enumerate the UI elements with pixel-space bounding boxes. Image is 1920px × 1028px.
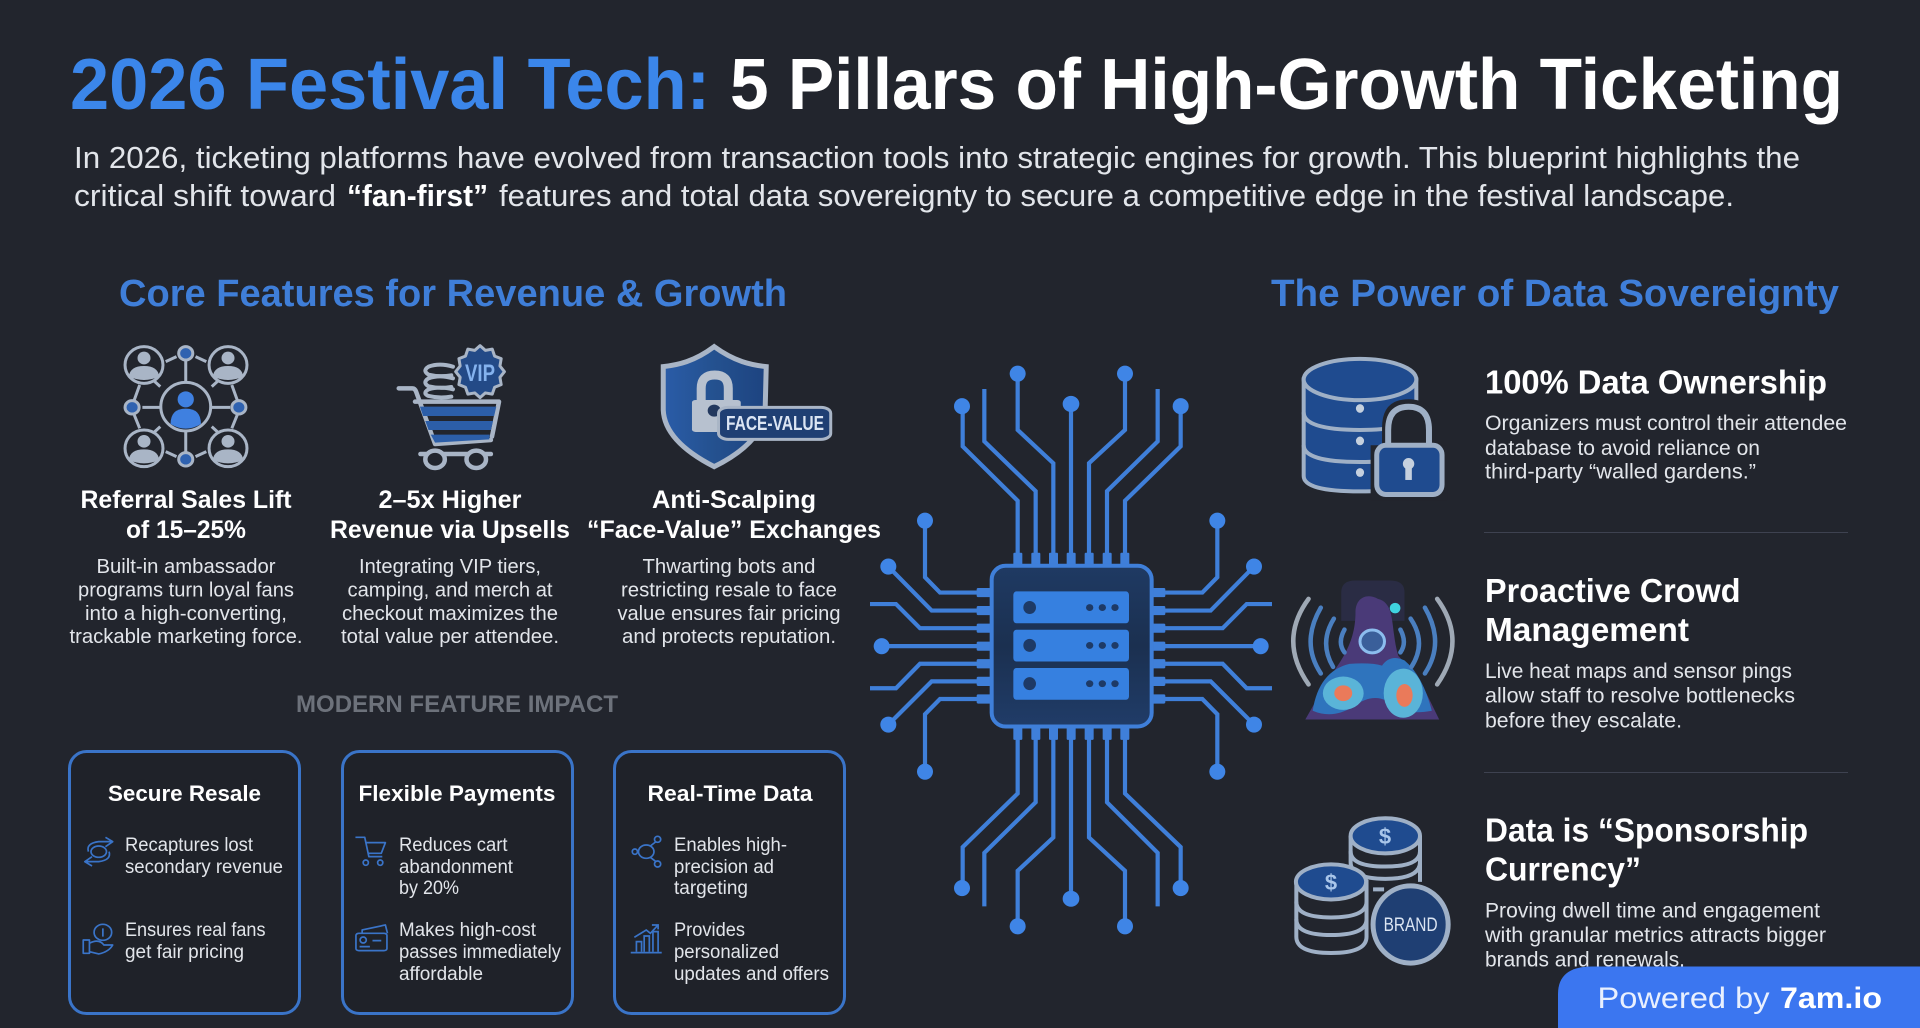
card title: Flexible Payments xyxy=(358,781,556,806)
feature body: camping, and merch at xyxy=(348,580,553,602)
item text: get fair pricing xyxy=(125,942,244,963)
feature body xyxy=(618,556,840,648)
title: 2026 Festival Tech: xyxy=(70,45,710,125)
item text: updates and offers xyxy=(674,964,829,985)
feature heading xyxy=(330,486,570,544)
feature body: and protects reputation. xyxy=(622,626,836,648)
chip body xyxy=(992,566,1152,727)
icon: resale arrows xyxy=(85,837,113,866)
feature body xyxy=(341,556,559,648)
item text xyxy=(399,835,514,899)
feature body: programs turn loyal fans xyxy=(78,580,294,602)
feature: referral sales xyxy=(70,347,302,648)
item text xyxy=(125,835,283,878)
intro text: features and total data sovereignty to secure a competitive edge in the festival landscape. xyxy=(499,178,1734,213)
feature body xyxy=(70,556,302,648)
icon: database with padlock xyxy=(1304,359,1447,500)
feature heading xyxy=(587,486,881,544)
pillar heading: Data is “Sponsorship xyxy=(1485,812,1808,848)
item text: affordable xyxy=(399,964,483,985)
title xyxy=(70,45,1843,125)
item text: Makes high-cost xyxy=(399,920,537,941)
feature: upsells xyxy=(330,346,570,648)
feature heading: 2–5x Higher xyxy=(378,486,522,514)
feature heading: Anti-Scalping xyxy=(652,486,816,514)
item text: abandonment xyxy=(399,857,514,878)
item text: Ensures real fans xyxy=(125,920,266,941)
powered by badge: 7am.io xyxy=(1780,982,1882,1015)
item text: targeting xyxy=(674,878,748,899)
feature heading: “Face-Value” Exchanges xyxy=(587,516,881,544)
intro text: “fan-first” xyxy=(347,178,488,213)
central chip illustration xyxy=(870,366,1272,934)
icon: referral network xyxy=(125,347,247,467)
feature body: value ensures fair pricing xyxy=(618,603,840,625)
pillar heading xyxy=(1485,572,1740,648)
feature heading: Referral Sales Lift xyxy=(80,486,292,514)
card: flexible payments xyxy=(342,752,572,1014)
icon: coins and brand token: BRAND xyxy=(1384,915,1438,936)
feature body: trackable marketing force. xyxy=(70,626,302,648)
pillar body: with granular metrics attracts bigger xyxy=(1484,923,1826,947)
pillar body xyxy=(1484,898,1826,972)
pillar body xyxy=(1485,659,1795,732)
item text xyxy=(674,835,787,899)
icon: shield with lock xyxy=(663,347,831,467)
item text xyxy=(125,920,266,963)
pillar body: before they escalate. xyxy=(1485,708,1682,732)
chip pins xyxy=(977,553,1165,740)
pillar body: Live heat maps and sensor pings xyxy=(1485,659,1792,683)
item text: Provides xyxy=(674,920,745,941)
card title: Real-Time Data xyxy=(648,781,813,806)
pillar heading: Management xyxy=(1485,611,1689,648)
icon: shield with lock: FACE-VALUE xyxy=(726,413,824,435)
intro text: In 2026, ticketing platforms have evolved from transaction tools into strategic engines for growth. This blueprint highlights the xyxy=(74,140,1800,175)
card title: Secure Resale xyxy=(108,781,261,806)
feature heading xyxy=(80,486,292,544)
feature heading: Revenue via Upsells xyxy=(330,516,570,544)
intro text: critical shift toward xyxy=(74,178,336,213)
pillar body: database to avoid reliance on xyxy=(1485,436,1760,460)
feature body: checkout maximizes the xyxy=(342,603,558,625)
item text: by 20% xyxy=(399,878,459,899)
pillar heading xyxy=(1485,812,1808,888)
icon: coins and brand token: $ xyxy=(1325,870,1337,895)
icon: coins and brand token xyxy=(1296,818,1448,963)
feature body: into a high-converting, xyxy=(85,603,287,625)
pillar: crowd management xyxy=(1293,572,1795,732)
card: real-time data xyxy=(614,752,844,1014)
pillar: sponsorship currency xyxy=(1296,812,1826,972)
item text: Reduces cart xyxy=(399,835,508,856)
pillar: data ownership xyxy=(1304,359,1847,500)
feature body: total value per attendee. xyxy=(341,626,559,648)
icon: cart with VIP badge xyxy=(399,346,504,468)
powered by badge: Powered by xyxy=(1598,982,1770,1015)
feature body: Integrating VIP tiers, xyxy=(359,556,541,578)
item text xyxy=(674,920,829,985)
icon: credit card xyxy=(356,925,387,951)
pillar heading: 100% Data Ownership xyxy=(1485,364,1827,400)
item text: Enables high- xyxy=(674,835,787,856)
item text: personalized xyxy=(674,942,779,963)
feature: anti-scalping xyxy=(587,347,881,648)
feature body: Built-in ambassador xyxy=(96,556,276,578)
heading: data sovereignty: The Power of Data Sovereignty xyxy=(1271,273,1839,315)
powered by badge xyxy=(1558,966,1920,1028)
server stack xyxy=(1013,591,1129,700)
item text xyxy=(399,920,561,985)
circuit traces xyxy=(870,374,1272,926)
section label: modern feature impact: MODERN FEATURE IMPACT xyxy=(296,691,618,718)
item text: Recaptures lost xyxy=(125,835,254,856)
icon: nodes xyxy=(632,836,661,867)
pillar body xyxy=(1485,411,1847,484)
icon: crowd heat map xyxy=(1293,580,1452,720)
item text: precision ad xyxy=(674,857,774,878)
pillar body: Proving dwell time and engagement xyxy=(1485,898,1820,922)
title: 5 Pillars of High-Growth Ticketing xyxy=(730,45,1843,125)
heading: core features: Core Features for Revenue & Growth xyxy=(119,273,787,315)
feature body: restricting resale to face xyxy=(621,580,837,602)
icon: cart xyxy=(355,837,385,865)
pillar body: brands and renewals. xyxy=(1485,948,1685,972)
icon: cart with VIP badge: VIP xyxy=(465,360,495,387)
pillar heading: Currency” xyxy=(1485,851,1641,888)
icon: coins and brand token: $ xyxy=(1379,824,1391,849)
item text: passes immediately xyxy=(399,942,561,963)
pillar body: third-party “walled gardens.” xyxy=(1485,460,1756,484)
feature body: Thwarting bots and xyxy=(642,556,816,578)
item text: secondary revenue xyxy=(125,857,283,878)
pillar heading: Proactive Crowd xyxy=(1485,572,1740,609)
icon: growth chart xyxy=(631,925,662,953)
icon: hand with coin xyxy=(83,924,113,954)
trace end dots xyxy=(874,366,1269,934)
intro text xyxy=(74,140,1800,213)
pillar body: allow staff to resolve bottlenecks xyxy=(1485,684,1795,708)
card: secure resale xyxy=(70,752,300,1014)
feature heading: of 15–25% xyxy=(126,516,246,544)
pillar body: Organizers must control their attendee xyxy=(1485,411,1847,435)
